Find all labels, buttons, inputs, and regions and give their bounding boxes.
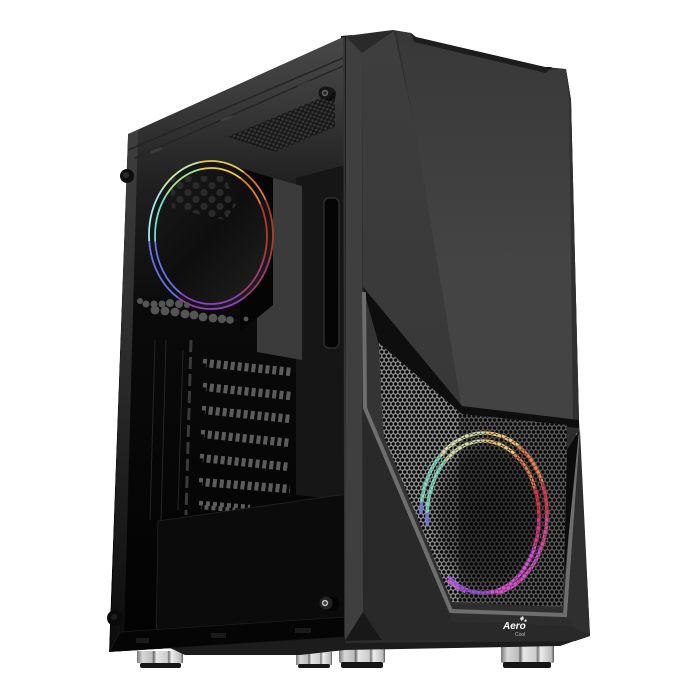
fan hex holes (170, 176, 236, 220)
glass base (109, 37, 345, 652)
top dark band (411, 33, 552, 73)
screw: bottom left (107, 610, 123, 626)
right cable cutout (324, 198, 339, 348)
front rgb fan ring (421, 433, 547, 595)
bottom slots (136, 628, 311, 643)
right lower facet (567, 430, 590, 636)
thumb screws (107, 86, 339, 626)
mesh grille (375, 340, 575, 610)
corner triangle (345, 612, 382, 641)
fan backing shadow (240, 168, 273, 330)
rear fan disc (168, 162, 272, 308)
top vent mesh (227, 92, 335, 152)
silver trim (364, 292, 578, 615)
bracket chain (150, 340, 191, 520)
lower left panel (363, 408, 590, 641)
brand logo (502, 616, 527, 638)
right dark vent (564, 431, 579, 580)
case underside (170, 632, 589, 655)
facet: large upper panel (396, 31, 579, 423)
screw: top left (120, 169, 134, 183)
seam between glass and front (341, 35, 352, 642)
cable grommet panel (257, 178, 302, 360)
pc case illustration (107, 30, 590, 668)
honeycomb row under fan (137, 298, 248, 324)
front panel (345, 30, 590, 643)
left trim area (363, 290, 450, 612)
screw: top right (318, 86, 336, 101)
foot: glass side rear (137, 651, 183, 668)
expansion slot vents (199, 361, 292, 510)
dark wedge above mesh (363, 287, 579, 428)
top slots (150, 80, 311, 154)
bottom rail (109, 617, 345, 652)
glass side panel (109, 37, 345, 652)
facet: top-left dark triangle (348, 30, 393, 53)
facet: left vertical strip (345, 37, 363, 640)
top inner rails (128, 58, 343, 158)
feet (137, 644, 554, 668)
brand logo: Aero (502, 621, 526, 632)
front body base (345, 30, 590, 643)
right edge shading (566, 69, 579, 423)
foot: middle rear (296, 652, 332, 668)
brand logo: Cool (515, 632, 525, 638)
front fan shadow (430, 440, 548, 590)
rear right column (296, 165, 345, 500)
left edge strip (110, 130, 138, 652)
facet: left slanted panel (362, 31, 462, 408)
screw: bottom right (320, 596, 339, 611)
foot: front left (339, 644, 385, 668)
psu shroud (156, 495, 345, 650)
rear rgb fan ring (149, 161, 273, 309)
foot: front right (501, 645, 554, 668)
glass right edge (344, 37, 345, 637)
